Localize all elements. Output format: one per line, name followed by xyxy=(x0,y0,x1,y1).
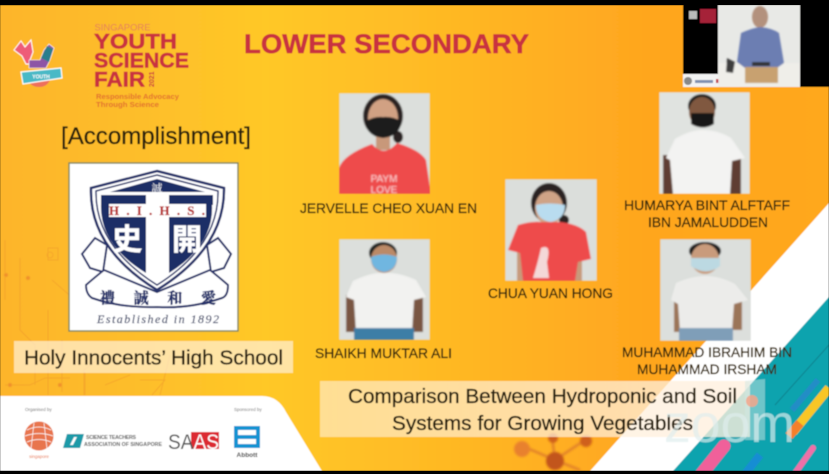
footer: organiser logos: Organised by xyxy=(25,407,53,412)
logo: singapore youth science fair wordmark: YOUTH xyxy=(94,30,177,54)
photo: muhammad xyxy=(660,239,751,341)
name: shaikh: SHAIKH MUKTAR ALI xyxy=(315,346,452,361)
logo: science teachers association of singapore: SCIENCE TEACHERS xyxy=(86,435,137,441)
logo: singapore youth science fair wordmark: SINGAPORE xyxy=(94,22,150,32)
logo: singapore youth science fair wordmark: Through Science xyxy=(96,100,159,109)
crest ribbon: 禮誠和愛 xyxy=(100,287,216,308)
decorative circuit pattern xyxy=(4,240,170,395)
crest shield: H.I.H.S. xyxy=(109,203,205,218)
name: muhammad xyxy=(622,345,792,377)
teal corner with coloured stripes xyxy=(673,297,829,474)
heading: accomplishment: [Accomplishment] xyxy=(61,123,251,150)
crest ribbon xyxy=(82,238,231,308)
logo: youth science fair mascot: YOUTH xyxy=(32,74,50,80)
name: humarya: IBN JAMALUDDEN xyxy=(648,215,768,230)
photo: shaikh xyxy=(339,239,430,340)
logo: science centre singapore xyxy=(24,422,54,459)
logo: youth science fair mascot xyxy=(14,40,62,87)
logo: saas: SAAS xyxy=(168,431,219,454)
logo: science teachers association of singapore: ASSOCIATION OF SINGAPORE xyxy=(84,442,163,448)
video: presenter webcam xyxy=(683,0,829,87)
decorative molecule xyxy=(514,433,592,470)
crest shield xyxy=(91,171,224,290)
logo: singapore youth science fair wordmark: FAIR xyxy=(94,68,145,92)
title: lower secondary: LOWER SECONDARY xyxy=(244,29,529,59)
logo: science centre singapore: singapore xyxy=(29,454,49,459)
panel: project title xyxy=(320,381,750,437)
photo: jervelle: LOVE xyxy=(371,185,398,196)
panel: project title: Systems for Growing Vegetables xyxy=(392,413,693,435)
name: muhammad: MUHAMMAD IRSHAM xyxy=(637,362,777,377)
logo: singapore youth science fair wordmark: Responsible Advocacy xyxy=(96,92,180,101)
crest shield: 史 xyxy=(112,215,142,259)
logo: abbott: Abbott xyxy=(237,452,258,459)
school crest panel xyxy=(69,163,238,331)
photo: chua xyxy=(505,179,597,281)
footer: organiser logos xyxy=(24,407,263,459)
name: chua: CHUA YUAN HONG xyxy=(488,286,613,301)
name: humarya: HUMARYA BINT ALFTAFF xyxy=(624,198,790,213)
logo: singapore youth science fair wordmark: SCIENCE xyxy=(94,48,189,72)
watermark: zoom: zoom xyxy=(664,394,795,454)
photo: humarya xyxy=(659,92,750,194)
logo: singapore youth science fair wordmark: 2021 xyxy=(149,71,156,87)
label: school name: Holy Innocents’ High School xyxy=(24,346,283,370)
photo: jervelle xyxy=(339,93,431,196)
name: humarya xyxy=(624,198,790,230)
crest shield: 開 xyxy=(172,215,202,259)
logo: science teachers association of singapore xyxy=(63,434,163,448)
logo: abbott xyxy=(236,428,258,459)
logo: singapore youth science fair wordmark xyxy=(94,22,189,109)
footer: organiser logos: Sponsored by xyxy=(234,407,263,412)
crest caption: Established in 1892 xyxy=(96,312,219,326)
label: school name xyxy=(14,341,293,373)
crest shield: 誠 xyxy=(152,180,162,196)
name: jervelle: JERVELLE CHEO XUAN EN xyxy=(300,201,477,216)
panel: project title: Comparison Between Hydroponic and Soil xyxy=(348,386,737,408)
white footer band and diagonal xyxy=(0,203,829,471)
name: muhammad: MUHAMMAD IBRAHIM BIN xyxy=(622,345,792,360)
photo: jervelle: PAYM xyxy=(371,174,397,185)
